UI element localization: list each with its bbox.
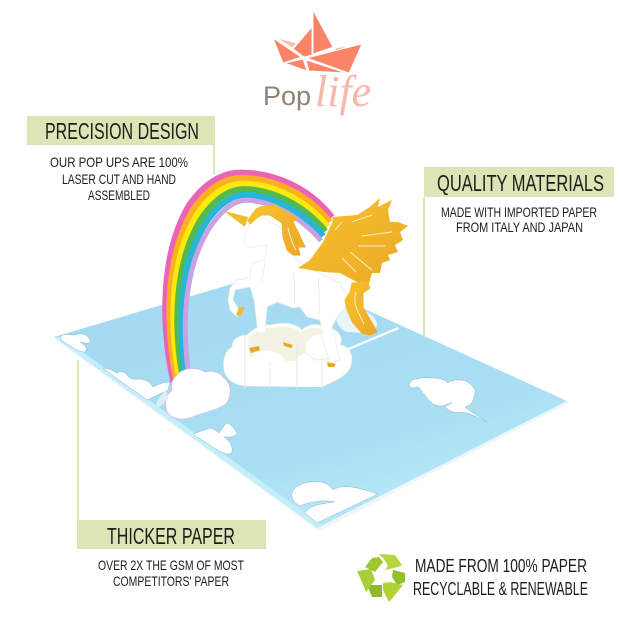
icon: origami boat [273, 10, 362, 73]
tail [345, 282, 377, 335]
panel: precision design [27, 116, 215, 203]
pop-up card illustration [54, 173, 569, 531]
panel: precision design: PRECISION DESIGN [45, 118, 199, 144]
cloud base [223, 323, 352, 390]
card floor [54, 270, 569, 531]
panel: thicker paper: OVER 2X THE GSM OF MOST [98, 557, 244, 573]
mane [248, 205, 305, 255]
front cloud [156, 369, 230, 419]
panel: precision design: ASSEMBLED [88, 187, 150, 203]
rainbow [165, 173, 332, 382]
panel: thicker paper [77, 520, 266, 589]
wordmark [263, 67, 371, 116]
panel: precision design: LASER CUT AND HAND [62, 171, 176, 187]
unicorn body [228, 217, 347, 363]
text: recyclable statement [413, 556, 588, 599]
body paper shading [262, 262, 320, 316]
logo: Poplife [263, 10, 371, 116]
icon: recycle symbol [357, 554, 405, 602]
wing [298, 198, 408, 287]
leader lines [77, 145, 425, 520]
wordmark: Pop [263, 81, 311, 111]
panel: quality materials [424, 167, 614, 235]
horn and hoof [224, 211, 248, 316]
panel: thicker paper: COMPETITORS' PAPER [113, 573, 229, 589]
panel: precision design: OUR POP UPS ARE 100% [50, 154, 188, 170]
cloud cutouts [61, 334, 487, 523]
cloud behind tail [335, 306, 377, 333]
panel: quality materials: FROM ITALY AND JAPAN [456, 219, 583, 235]
panel: thicker paper: THICKER PAPER [107, 523, 235, 549]
wordmark: life [315, 67, 371, 116]
